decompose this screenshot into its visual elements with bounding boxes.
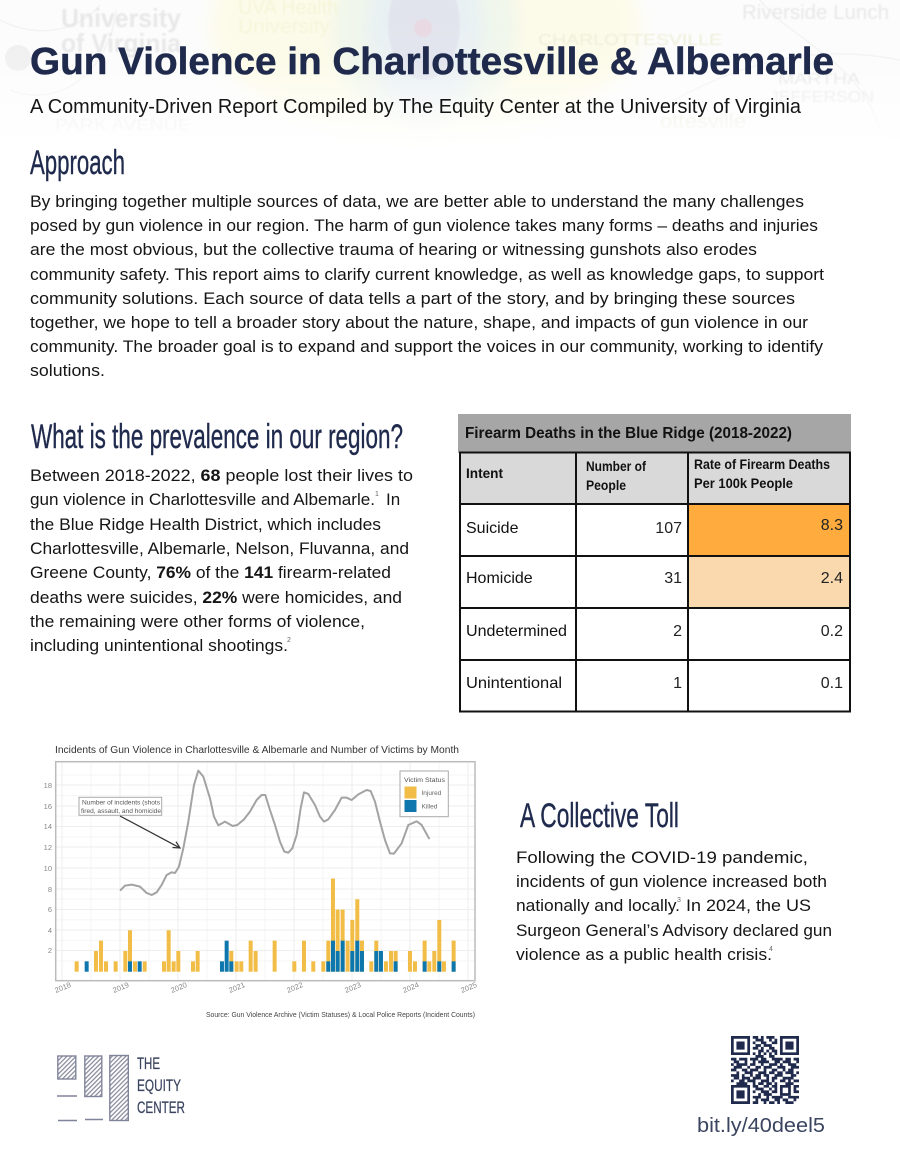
text block: a collective toll: incidents of gun violence increased both bbox=[516, 872, 827, 891]
background: faded heat map: MARTHA bbox=[778, 71, 860, 88]
table row: homicide: 31 bbox=[664, 570, 682, 587]
table title bar bbox=[458, 414, 851, 453]
table row: homicide bbox=[466, 570, 843, 587]
text block: approach: solutions. bbox=[30, 361, 105, 380]
callout: number of incidents: fired, assault, and homicide bbox=[81, 808, 161, 815]
background: faded heat map: University bbox=[238, 16, 330, 38]
legend: victim status: Injured bbox=[422, 790, 442, 797]
x axis labels bbox=[53, 980, 478, 995]
logo: the equity center: CENTER bbox=[137, 1098, 185, 1117]
text block: approach: community solutions. Each source of data tells a part of the story, and by bringing these sources bbox=[30, 289, 795, 308]
text block: a collective toll: nationally and locally. bbox=[516, 896, 680, 915]
table header row: Per 100k People bbox=[694, 476, 793, 491]
text block: approach: community safety. This report aims to clarify current knowledge, as well as knowledge gaps, to support bbox=[30, 265, 824, 284]
x axis labels: 2021 bbox=[227, 980, 246, 995]
table row: undetermined: 2 bbox=[673, 623, 682, 640]
table row: undetermined: Undetermined bbox=[466, 623, 567, 640]
x axis labels: 2019 bbox=[111, 980, 130, 995]
callout: number of incidents: Number of incidents (shots bbox=[82, 800, 161, 806]
table row: suicide: 8.3 bbox=[821, 517, 843, 534]
y axis labels: 2 bbox=[48, 946, 52, 955]
table header row bbox=[460, 453, 850, 504]
x axis labels: 2018 bbox=[53, 980, 72, 995]
table rate highlight cells bbox=[688, 504, 850, 608]
table row: suicide bbox=[466, 517, 843, 537]
background: faded heat map: JEFFERSON bbox=[770, 89, 874, 106]
logo: the equity center: EQUITY bbox=[137, 1076, 181, 1095]
heading: a collective toll: A Collective Toll bbox=[520, 797, 679, 835]
legend: victim status: Killed bbox=[422, 804, 438, 810]
y axis labels: 10 bbox=[44, 864, 52, 873]
y axis labels: 14 bbox=[44, 822, 52, 831]
table grid bbox=[460, 452, 850, 712]
chart title: Incidents of Gun Violence in Charlottesville & Albemarle and Number of Victims by Month bbox=[55, 745, 459, 756]
y axis labels: 12 bbox=[44, 843, 52, 852]
table row: unintentional: 1 bbox=[673, 675, 682, 692]
table row: unintentional: 0.1 bbox=[821, 675, 843, 692]
text block: approach: By bringing together multiple sources of data, we are better able to understand the many challenges bbox=[30, 192, 804, 211]
callout: number of incidents bbox=[79, 797, 162, 815]
table row: undetermined: 0.2 bbox=[821, 623, 843, 640]
table header row: Rate of Firearm Deaths bbox=[694, 457, 830, 472]
text block: approach: community. The broader goal is to expand and support the voices in our community, working to identify bbox=[30, 337, 824, 356]
map marker bbox=[5, 45, 31, 71]
title: Gun Violence in Charlottesville & Albemarle bbox=[30, 41, 834, 83]
background: faded heat map: ottesville bbox=[660, 111, 746, 133]
legend: victim status: Victim Status bbox=[404, 777, 446, 784]
text block: prevalence: In bbox=[386, 490, 400, 509]
text block: prevalence: 1 bbox=[375, 491, 379, 498]
text block: approach: together, we hope to tell a broader story about the nature, shape, and impacts of gun violence in our bbox=[30, 313, 808, 332]
text block: prevalence: Between 2018-2022, 68 people lost their lives to bbox=[30, 466, 413, 485]
table header row: People bbox=[586, 478, 626, 493]
text block: prevalence: Charlottesville, Albemarle, Nelson, Fluvanna, and bbox=[30, 539, 409, 558]
text block: prevalence: the remaining were other forms of violence, bbox=[30, 612, 365, 631]
text block: prevalence: the Blue Ridge Health District, which includes bbox=[30, 515, 381, 534]
table row: undetermined bbox=[466, 623, 843, 640]
table header row: Number of bbox=[586, 459, 646, 474]
text block: approach bbox=[30, 192, 824, 380]
text block: a collective toll: Following the COVID-19 pandemic, bbox=[516, 848, 808, 867]
background: faded heat map: PARK AVENUE bbox=[55, 117, 191, 134]
qr code bbox=[731, 1036, 799, 1104]
text block: a collective toll: violence as a public health crisis. bbox=[516, 945, 772, 964]
text block: prevalence: 2 bbox=[287, 637, 291, 644]
bars: killed victims bbox=[85, 941, 456, 972]
legend: victim status bbox=[400, 771, 448, 817]
chart source: Source: Gun Violence Archive (Victim Statuses) & Local Police Reports (Incident Counts) bbox=[206, 1010, 475, 1019]
background: faded heat map: University bbox=[61, 3, 182, 33]
chart: incidents and victims by month bbox=[44, 745, 478, 1019]
y axis labels: 18 bbox=[44, 781, 52, 790]
heading: approach: Approach bbox=[30, 144, 125, 182]
qr link text: bit.ly/40deel5 bbox=[697, 1115, 825, 1137]
x axis labels: 2024 bbox=[401, 980, 420, 995]
subtitle: A Community-Driven Report Compiled by The Equity Center at the University of Virginia bbox=[30, 96, 802, 118]
table row: suicide: 107 bbox=[655, 520, 682, 537]
x axis labels: 2022 bbox=[285, 980, 304, 995]
text block: approach: are the most obvious, but the collective trauma of hearing or witnessing gunshots also erodes bbox=[30, 240, 757, 259]
background: faded heat map: Riverside Lunch bbox=[742, 2, 889, 24]
x axis labels: 2020 bbox=[169, 980, 188, 995]
arrow: callout to line bbox=[120, 816, 180, 848]
table row: unintentional: Unintentional bbox=[466, 675, 562, 692]
y axis labels: 4 bbox=[48, 926, 52, 935]
y axis labels: 16 bbox=[44, 802, 52, 811]
text block: approach: posed by gun violence in our region. The harm of gun violence takes many forms – deaths and injuries bbox=[30, 216, 818, 235]
bars: injured victims bbox=[75, 879, 456, 972]
text block: a collective toll: 3 bbox=[677, 897, 681, 904]
y axis labels: 6 bbox=[48, 905, 52, 914]
logo: the equity center bbox=[57, 1054, 185, 1120]
x axis labels: 2025 bbox=[459, 980, 478, 995]
table row: homicide: Homicide bbox=[466, 570, 533, 587]
background: faded heat map: of Virginia bbox=[61, 28, 182, 58]
text block: prevalence: including unintentional shootings. bbox=[30, 636, 288, 655]
x axis labels: 2023 bbox=[343, 980, 362, 995]
background: faded heat map bbox=[0, 0, 900, 180]
table row: suicide: Suicide bbox=[466, 520, 519, 537]
heading: prevalence: What is the prevalence in our region? bbox=[31, 418, 403, 456]
text block: a collective toll: In 2024, the US bbox=[686, 896, 811, 915]
line: number of incidents bbox=[121, 771, 429, 895]
text block: prevalence bbox=[30, 466, 413, 655]
table row: homicide: 2.4 bbox=[821, 570, 843, 587]
logo: the equity center: THE bbox=[137, 1054, 160, 1073]
text block: a collective toll: Surgeon General’s Advisory declared gun bbox=[516, 921, 832, 940]
table: firearm deaths bbox=[458, 414, 851, 712]
text block: prevalence: Greene County, 76% of the 141 firearm-related bbox=[30, 563, 391, 582]
text block: prevalence: gun violence in Charlottesville and Albemarle. bbox=[30, 490, 375, 509]
table header row: Intent bbox=[466, 466, 504, 481]
y axis labels bbox=[44, 781, 52, 955]
y axis labels: 8 bbox=[48, 885, 52, 894]
text block: a collective toll: 4 bbox=[769, 946, 773, 953]
table title bar: Firearm Deaths in the Blue Ridge (2018-2022) bbox=[465, 425, 792, 442]
text block: prevalence: deaths were suicides, 22% were homicides, and bbox=[30, 588, 402, 607]
background: faded heat map: CHARLOTTESVILLE bbox=[538, 32, 722, 49]
text block: a collective toll bbox=[516, 848, 832, 964]
table row: unintentional bbox=[466, 675, 843, 692]
